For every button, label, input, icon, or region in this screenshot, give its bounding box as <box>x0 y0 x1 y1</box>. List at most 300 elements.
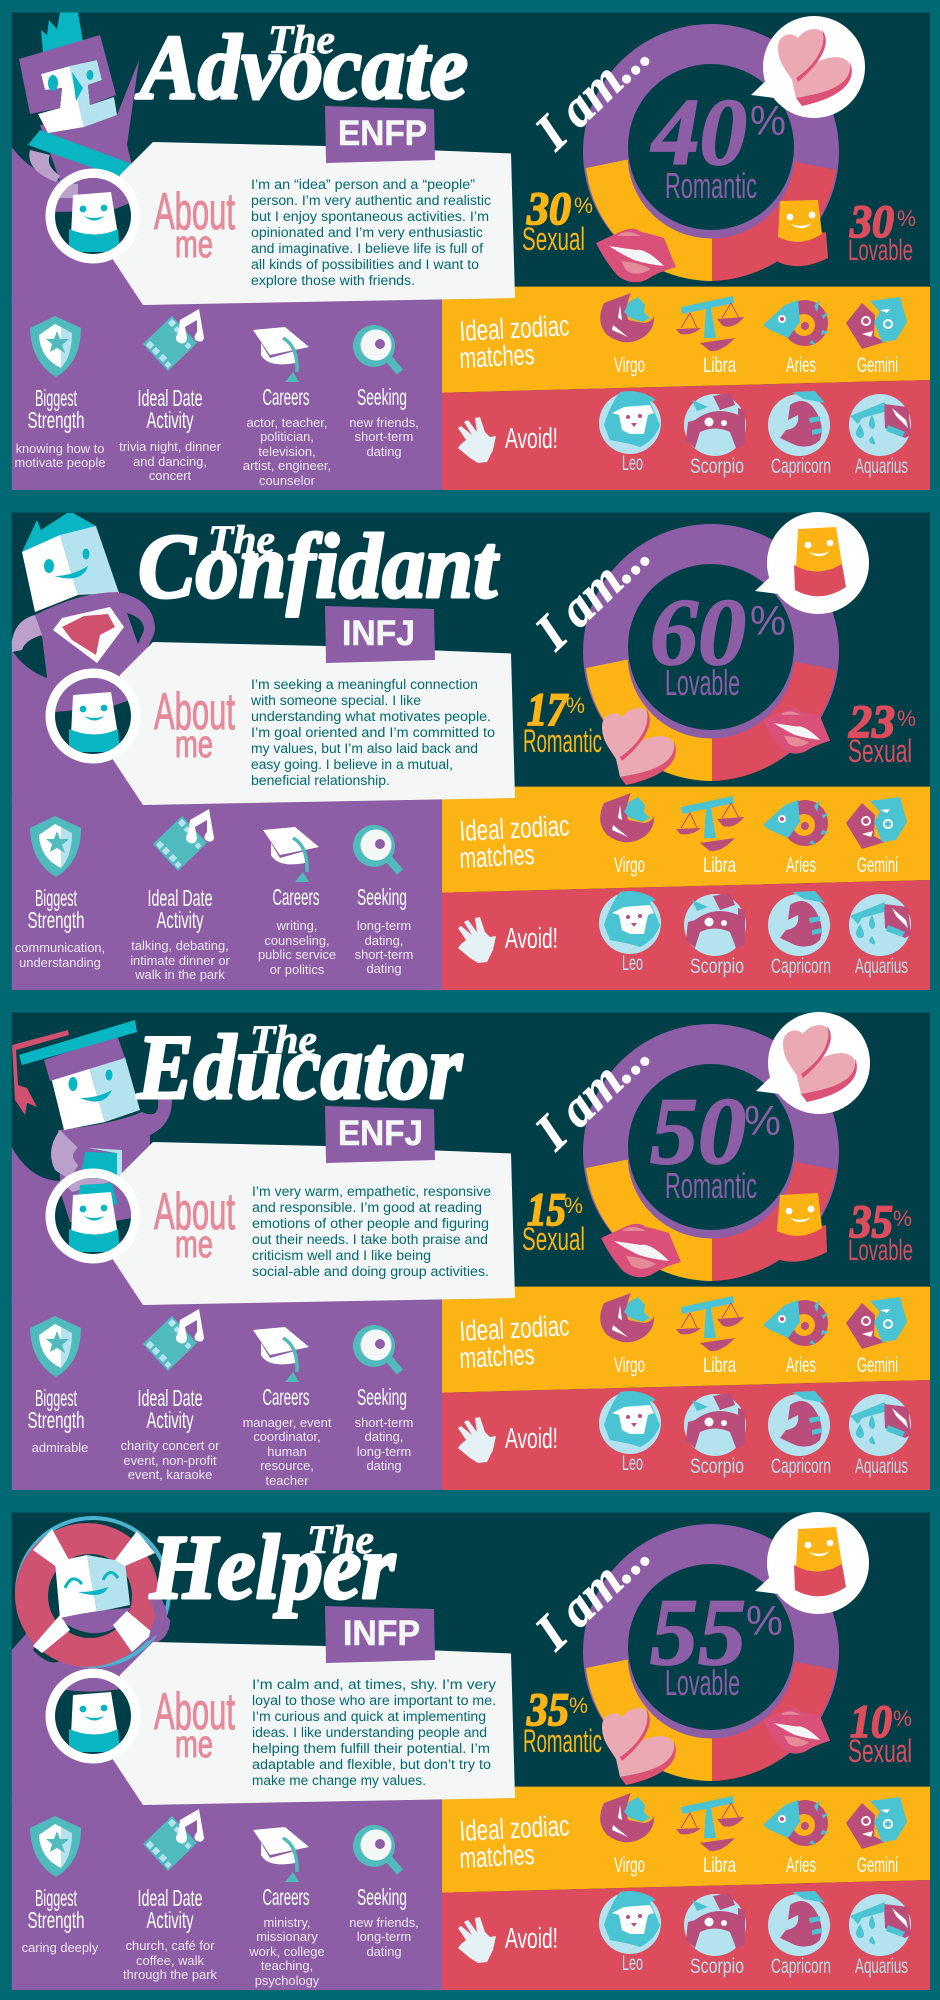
portrait badge <box>46 668 140 764</box>
zodiac: Aquarius: Aquarius <box>855 455 908 478</box>
purple sidebar <box>12 1295 443 1490</box>
about me heading: About <box>154 1683 235 1741</box>
title: The <box>268 17 335 62</box>
zodiac: Aries <box>763 300 829 377</box>
stat 35% Romantic: % <box>569 1693 588 1718</box>
zodiac: Leo <box>599 391 661 475</box>
stat: careers: Careers <box>262 1384 310 1410</box>
about text: I’m an “idea” person and a “people” <box>251 177 475 192</box>
zodiac: Libra: Libra <box>703 1854 736 1877</box>
about text: opinionated and I’m very enthusiastic <box>251 225 483 240</box>
zodiac: Gemini <box>846 797 907 877</box>
stat: seeking: Seeking <box>357 1384 407 1410</box>
zodiac: Gemini: Gemini <box>857 354 898 377</box>
stat 35% Lovable: 35 <box>849 1196 893 1248</box>
stat: biggest strength <box>22 1816 99 1955</box>
main stat 50% Romantic <box>650 1078 781 1206</box>
zodiac: Gemini <box>846 297 907 377</box>
type badge INFJ: INFJ <box>342 614 415 653</box>
panel: The Advocate <box>12 12 930 490</box>
stat: biggest strength: Strength <box>28 907 84 933</box>
avoid band <box>442 1880 930 1990</box>
zodiac: Capricorn <box>768 391 831 478</box>
stat: careers: work, college <box>248 1944 325 1959</box>
stat: ideal date activity: Activity <box>146 1907 194 1933</box>
stat: biggest strength: motivate people <box>14 455 106 470</box>
zodiac: Virgo: Virgo <box>614 854 645 877</box>
stat: biggest strength: Strength <box>28 407 84 433</box>
about text: I’m very warm, empathetic, responsive <box>252 1184 491 1199</box>
I am label: I am... <box>524 26 661 161</box>
zodiac: Gemini <box>846 1297 907 1377</box>
main stat 60% Lovable: 60 <box>650 579 746 685</box>
title: The <box>250 1017 317 1062</box>
stat: seeking: long-term <box>357 918 411 933</box>
stat 15% Sexual: % <box>564 1193 583 1218</box>
main stat 40% Romantic <box>650 79 786 206</box>
panel: The Confidant <box>12 512 930 990</box>
stat: careers: counseling, <box>264 933 330 948</box>
stat: biggest strength <box>28 1316 88 1455</box>
stat: careers: Careers <box>272 884 320 910</box>
stat 30% Lovable <box>848 196 916 267</box>
stat 30% Sexual <box>522 183 593 257</box>
stat: careers: politician, <box>260 429 314 444</box>
stat: ideal date activity <box>130 809 230 982</box>
stat: biggest strength <box>15 816 105 970</box>
zodiac heading: Ideal zodiac <box>459 1310 570 1348</box>
stat: careers: television, <box>258 444 316 459</box>
stat 23% Sexual: % <box>897 706 916 731</box>
zodiac: Aries: Aries <box>786 1854 816 1877</box>
avoid heading: Avoid! <box>505 423 558 455</box>
donut chart: 55 lovable, 35 romantic, 10 sexual <box>583 1524 839 1781</box>
stat 23% Sexual <box>848 696 916 769</box>
stat: seeking <box>349 1825 419 1959</box>
zodiac: Libra: Libra <box>703 354 736 377</box>
about text: I’m calm and, at times, shy. I’m very <box>252 1677 496 1692</box>
purple sidebar <box>12 295 443 490</box>
stat: biggest strength: admirable <box>32 1440 88 1455</box>
stat: careers <box>243 1327 332 1488</box>
about text: I’m curious and quick at implementing <box>252 1709 486 1724</box>
stat: biggest strength <box>14 316 106 470</box>
about text: and responsible. I’m good at reading <box>252 1200 482 1215</box>
zodiac: Scorpio: Scorpio <box>690 455 744 478</box>
main stat 55% Lovable: Lovable <box>665 1662 740 1703</box>
portrait badge <box>46 168 140 264</box>
donut chart: 50 romantic, 15 sexual, 35 lovable <box>583 1024 839 1281</box>
zodiac: Aquarius <box>849 894 911 978</box>
stat: careers: public service <box>258 947 336 962</box>
title: Helper <box>149 1516 396 1618</box>
stat 10% Sexual: % <box>893 1706 912 1731</box>
stat: seeking: dating, <box>365 1429 403 1444</box>
about card <box>100 1142 515 1305</box>
zodiac: Capricorn: Capricorn <box>771 955 831 978</box>
main stat 50% Romantic: % <box>744 1097 781 1144</box>
zodiac: Aries <box>763 800 829 877</box>
stat: careers: resource, <box>260 1458 314 1473</box>
zodiac: Libra <box>676 296 744 377</box>
stat: careers: teacher <box>266 1473 309 1488</box>
zodiac: Virgo <box>600 293 654 377</box>
about text <box>252 1184 491 1279</box>
speech bubble with smiley <box>755 1512 869 1614</box>
stat: ideal date activity: through the park <box>123 1967 217 1982</box>
zodiac: Gemini: Gemini <box>857 1854 898 1877</box>
zodiac: Scorpio: Scorpio <box>690 955 744 978</box>
stat 30% Lovable: % <box>897 206 916 231</box>
zodiac heading <box>459 1310 570 1375</box>
stat: ideal date activity: Activity <box>146 407 194 433</box>
type badge INFP <box>325 1606 435 1663</box>
about text: and imaginative. I believe life is full of <box>251 241 483 256</box>
stat: biggest strength: knowing how to <box>16 441 104 456</box>
icon: lips <box>596 229 676 282</box>
stat: careers: manager, event <box>243 1415 332 1430</box>
zodiac: Aries: Aries <box>786 1354 816 1377</box>
stat: biggest strength: Biggest <box>35 885 77 911</box>
character: Helper holding a life ring <box>12 1518 170 1805</box>
zodiac: Scorpio <box>684 1393 746 1478</box>
stat: ideal date activity: coffee, walk <box>136 1953 204 1968</box>
stat: ideal date activity: Ideal Date <box>138 1385 202 1411</box>
I am label: I am... <box>524 526 661 661</box>
stat: ideal date activity: event, non-profit <box>123 1453 217 1468</box>
I am label: I am... <box>524 1526 661 1661</box>
stat: seeking: Seeking <box>357 384 407 410</box>
stat: ideal date activity: intimate dinner or <box>130 953 230 968</box>
about card <box>100 142 515 305</box>
about text: out their needs. I take both praise and <box>252 1232 488 1247</box>
stat 35% Romantic <box>523 1684 602 1759</box>
main stat 55% Lovable: 55 <box>650 1579 746 1685</box>
about me heading: About <box>154 683 235 741</box>
stat: seeking: short-term <box>355 429 413 444</box>
zodiac: Libra <box>676 1296 744 1377</box>
icon: hand <box>458 1417 496 1463</box>
zodiac: Libra <box>676 1796 744 1877</box>
stat: seeking: dating <box>366 1944 402 1959</box>
stat: seeking: dating, <box>365 933 403 948</box>
stat: careers: actor, teacher, <box>247 415 327 430</box>
stat: seeking: Seeking <box>357 884 407 910</box>
stat 35% Romantic: 35 <box>526 1684 569 1736</box>
title: Confidant <box>138 515 499 617</box>
zodiac: Virgo: Virgo <box>614 1854 645 1877</box>
zodiac heading: Ideal zodiac <box>459 310 570 348</box>
zodiac match band <box>442 1787 930 1893</box>
zodiac: Gemini: Gemini <box>857 1354 898 1377</box>
zodiac: Aquarius: Aquarius <box>855 1455 908 1478</box>
zodiac: Leo <box>599 1891 661 1975</box>
stat: careers <box>248 1827 325 1988</box>
main stat 60% Lovable: Lovable <box>665 662 740 703</box>
avoid band <box>442 380 930 490</box>
stat: ideal date activity: and dancing, <box>133 454 207 469</box>
stat: ideal date activity <box>123 1809 217 1982</box>
about me heading: About <box>154 183 235 241</box>
zodiac: Gemini <box>846 1797 907 1877</box>
icon: hand <box>458 1917 496 1963</box>
zodiac: Aquarius: Aquarius <box>855 1955 908 1978</box>
icon: lips <box>763 1709 830 1754</box>
purple sidebar <box>12 795 443 990</box>
type badge ENFP: ENFP <box>338 114 427 153</box>
zodiac: Virgo <box>600 1293 654 1377</box>
stat: ideal date activity: church, café for <box>126 1938 215 1953</box>
stat: ideal date activity <box>121 1309 220 1482</box>
stat 10% Sexual: 10 <box>850 1696 892 1748</box>
stat 35% Lovable <box>848 1196 913 1267</box>
donut chart: 60 lovable, 17 romantic, 23 sexual <box>583 524 839 781</box>
portrait badge <box>46 1168 140 1264</box>
purple sidebar <box>12 1795 443 1990</box>
stat: biggest strength: caring deeply <box>22 1940 99 1955</box>
about me heading <box>154 1683 235 1766</box>
zodiac: Virgo: Virgo <box>614 354 645 377</box>
stat 15% Sexual <box>522 1184 585 1257</box>
zodiac heading: Ideal zodiac <box>459 810 570 848</box>
zodiac: Libra: Libra <box>703 1354 736 1377</box>
zodiac: Libra <box>676 796 744 877</box>
stat 35% Lovable: % <box>893 1206 912 1231</box>
type badge INFP: INFP <box>343 1614 420 1653</box>
stat 30% Lovable: 30 <box>849 196 894 248</box>
main stat 40% Romantic: % <box>750 97 786 144</box>
stat 30% Sexual: 30 <box>526 183 571 235</box>
type badge ENFP <box>325 106 435 163</box>
stat 30% Sexual: % <box>574 193 593 218</box>
stat 15% Sexual: Sexual <box>522 1221 585 1257</box>
stat: careers: writing, <box>276 918 317 933</box>
about me heading: me <box>175 224 213 266</box>
title: Advocate <box>135 16 468 118</box>
zodiac: Libra: Libra <box>703 854 736 877</box>
about text: beneficial relationship. <box>251 773 390 788</box>
character: Educator with graduation cap and book <box>12 1020 172 1305</box>
stat 10% Sexual <box>848 1696 912 1769</box>
main stat 55% Lovable <box>650 1579 783 1703</box>
stat: ideal date activity: Activity <box>156 907 204 933</box>
character: Confidant with super emblem <box>12 513 155 805</box>
stat: careers: ministry, <box>263 1915 311 1930</box>
about text: adaptable and flexible, but don’t try to <box>252 1757 491 1772</box>
zodiac: Aries: Aries <box>786 354 816 377</box>
about text <box>251 177 491 288</box>
icon: smiley <box>778 200 828 266</box>
about me heading <box>154 683 235 766</box>
about me heading: me <box>175 1724 213 1766</box>
main stat 50% Romantic: Romantic <box>665 1165 757 1206</box>
stat: seeking <box>353 1325 413 1473</box>
zodiac: Scorpio: Scorpio <box>690 1955 744 1978</box>
stat: careers: or politics <box>270 962 324 977</box>
about text: with someone special. I like <box>250 693 421 708</box>
zodiac: Aries: Aries <box>786 854 816 877</box>
zodiac heading: matches <box>459 1339 535 1375</box>
stat: ideal date activity: concert <box>149 468 192 483</box>
stat: seeking: dating <box>366 1458 402 1473</box>
zodiac: Scorpio <box>684 393 746 478</box>
stat: seeking: Seeking <box>357 1884 407 1910</box>
zodiac heading: Ideal zodiac <box>459 1810 570 1848</box>
stat 17% Romantic: 17 <box>527 684 569 736</box>
stat: biggest strength: understanding <box>19 955 101 970</box>
panel: The Educator <box>12 1012 930 1490</box>
stat: seeking: long-term <box>357 1929 411 1944</box>
type badge INFJ <box>325 606 435 663</box>
character: Advocate with mask and raised arm <box>12 12 150 305</box>
stat: seeking: short-term <box>355 947 413 962</box>
zodiac: Aries <box>763 1300 829 1377</box>
stat: careers: missionary <box>256 1929 318 1944</box>
zodiac heading: matches <box>459 1839 535 1875</box>
zodiac: Leo <box>599 891 661 975</box>
zodiac heading <box>459 810 570 875</box>
about text: explore those with friends. <box>251 273 415 288</box>
stat: careers <box>243 327 331 488</box>
main stat 40% Romantic: 40 <box>650 79 747 185</box>
about text: I’m goal oriented and I’m committed to <box>251 725 495 740</box>
about text: my values, but I’m also laid back and <box>251 741 478 756</box>
panel background <box>12 1012 930 1490</box>
stat: ideal date activity: Ideal Date <box>138 1885 202 1911</box>
zodiac: Capricorn <box>768 1891 831 1978</box>
avoid band <box>442 880 930 990</box>
panel background <box>12 12 930 490</box>
portrait badge <box>46 1668 140 1764</box>
stat: biggest strength: communication, <box>15 940 105 955</box>
about me heading: me <box>175 1224 213 1266</box>
about text: person. I’m very authentic and realistic <box>251 193 491 208</box>
stat 30% Sexual: Sexual <box>522 221 585 257</box>
main stat 60% Lovable <box>650 579 786 703</box>
icon: hand <box>458 917 496 963</box>
zodiac match band <box>442 287 930 393</box>
zodiac: Virgo <box>600 1793 654 1877</box>
zodiac: Capricorn: Capricorn <box>771 1455 831 1478</box>
icon: lips <box>763 709 830 754</box>
stat: ideal date activity: Ideal Date <box>138 385 202 411</box>
zodiac: Scorpio <box>684 893 746 978</box>
stat: seeking: long-term <box>357 1444 411 1459</box>
zodiac: Leo <box>599 1391 661 1475</box>
about text <box>252 1677 496 1788</box>
avoid heading: Avoid! <box>505 923 558 955</box>
zodiac: Leo: Leo <box>622 1952 643 1975</box>
stat 17% Romantic <box>523 684 602 759</box>
stat: careers: Careers <box>262 384 310 410</box>
stat: seeking: dating <box>366 961 402 976</box>
stat 35% Romantic: Romantic <box>523 1723 602 1759</box>
stat: seeking <box>349 325 419 459</box>
stat: careers: artist, engineer, <box>243 458 331 473</box>
stat: biggest strength: Strength <box>28 1907 84 1933</box>
stat: ideal date activity: Activity <box>146 1407 194 1433</box>
stat: biggest strength: Biggest <box>35 385 77 411</box>
about text: but I enjoy spontaneous activities. I’m <box>251 209 489 224</box>
donut chart: 40 romantic, 30 sexual, 30 lovable <box>583 24 839 281</box>
title: The <box>208 517 275 562</box>
stat: careers <box>258 827 336 977</box>
icon: smiley <box>777 1193 827 1262</box>
about text: make me change my values. <box>252 1773 426 1788</box>
stat 15% Sexual: 15 <box>527 1184 566 1236</box>
about text: loyal to those who are important to me. <box>252 1693 496 1708</box>
about text: I’m seeking a meaningful connection <box>251 677 478 692</box>
about card <box>100 642 515 805</box>
stat: seeking <box>353 825 413 976</box>
stat: ideal date activity: event, karaoke <box>128 1467 212 1482</box>
zodiac: Capricorn: Capricorn <box>771 1955 831 1978</box>
stat: ideal date activity <box>119 309 222 483</box>
main stat 55% Lovable: % <box>746 1597 783 1644</box>
stat: careers: human <box>267 1444 307 1459</box>
panel background <box>12 512 930 990</box>
stat: careers: psychology <box>255 1973 320 1988</box>
title: Educator <box>136 1016 463 1118</box>
zodiac: Aquarius <box>849 394 911 478</box>
zodiac: Aries <box>763 1800 829 1877</box>
about me heading: About <box>154 1183 235 1241</box>
stat: careers: Careers <box>262 1884 310 1910</box>
stat: seeking: new friends, <box>349 1915 419 1930</box>
icon: heart <box>602 1708 676 1785</box>
zodiac: Capricorn <box>768 891 831 978</box>
zodiac: Scorpio <box>684 1893 746 1978</box>
icon: heart <box>602 708 676 785</box>
icon: lips <box>601 1224 681 1277</box>
zodiac: Capricorn: Capricorn <box>771 455 831 478</box>
stat: biggest strength: Biggest <box>35 1885 77 1911</box>
avoid heading: Avoid! <box>505 1923 558 1955</box>
speech bubble with heart <box>751 16 865 118</box>
about me heading: me <box>175 724 213 766</box>
stat 17% Romantic: Romantic <box>523 723 602 759</box>
stat: ideal date activity: walk in the park <box>134 967 225 982</box>
about text: social-able and doing group activities. <box>252 1264 489 1279</box>
stat: seeking: short-term <box>355 1415 413 1430</box>
zodiac: Aquarius <box>849 1394 911 1478</box>
title: The <box>307 1517 374 1562</box>
stat: biggest strength: Strength <box>28 1407 84 1433</box>
about text: understanding what motivates people. <box>251 709 491 724</box>
stat: seeking: dating <box>366 444 402 459</box>
zodiac: Scorpio: Scorpio <box>690 1455 744 1478</box>
stat 17% Romantic: % <box>566 693 585 718</box>
about card <box>100 1642 515 1805</box>
zodiac: Aquarius <box>849 1894 911 1978</box>
panel background <box>12 1512 930 1990</box>
stat: ideal date activity: Ideal Date <box>148 885 212 911</box>
zodiac: Gemini: Gemini <box>857 854 898 877</box>
about text: easy going. I believe in a mutual, <box>251 757 453 772</box>
zodiac: Leo: Leo <box>622 952 643 975</box>
about text: criticism well and I like being <box>252 1248 431 1263</box>
icon: hand <box>458 417 496 463</box>
panel: The Helper <box>12 1512 930 1990</box>
main stat 50% Romantic: 50 <box>650 1078 746 1184</box>
about text: all kinds of possibilities and I want to <box>251 257 479 272</box>
stat: ideal date activity: talking, debating, <box>131 938 229 953</box>
zodiac: Leo: Leo <box>622 452 643 475</box>
stat: careers: counselor <box>259 473 316 488</box>
zodiac heading <box>459 1810 570 1875</box>
zodiac: Capricorn <box>768 1391 831 1478</box>
zodiac heading: matches <box>459 339 535 375</box>
